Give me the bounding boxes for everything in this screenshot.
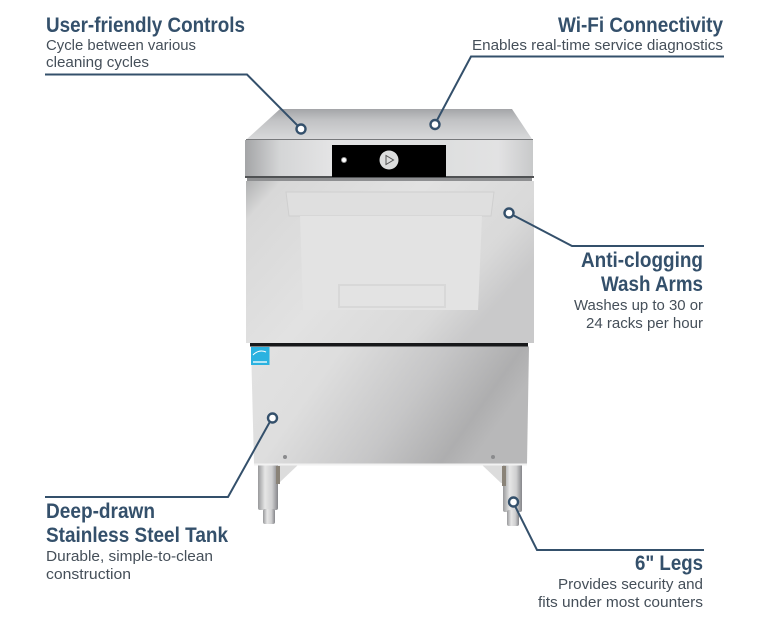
description <box>538 576 703 611</box>
left leg <box>258 463 299 524</box>
description: Cycle between various <box>46 37 196 54</box>
description: cleaning cycles <box>46 54 149 71</box>
description: fits under most counters <box>538 594 703 611</box>
right leg <box>481 463 522 526</box>
description: Enables real-time service diagnostics <box>472 37 723 54</box>
leader line <box>435 56 724 124</box>
marker <box>296 124 306 134</box>
indicator light <box>342 158 346 162</box>
door handle <box>286 192 494 216</box>
top panel <box>247 109 532 139</box>
description <box>46 37 196 71</box>
callout: wi-fi connectivity <box>430 14 724 129</box>
door <box>246 181 534 343</box>
heading <box>46 500 228 547</box>
heading: 6" Legs <box>635 552 703 575</box>
marker <box>430 120 440 129</box>
callout: user-friendly controls <box>45 14 306 134</box>
lower panel <box>251 346 529 466</box>
control band <box>245 140 533 176</box>
start button <box>380 150 398 170</box>
callout: anti-clogging wash arms <box>504 208 704 332</box>
heading: Stainless Steel Tank <box>46 524 228 547</box>
description <box>574 297 703 332</box>
callout: 6 inch legs <box>509 498 704 611</box>
description <box>46 548 213 583</box>
description: Washes up to 30 or <box>574 297 703 314</box>
description: construction <box>46 566 131 583</box>
heading <box>581 249 703 296</box>
leader line <box>513 502 704 550</box>
description: Durable, simple-to-clean <box>46 548 213 565</box>
heading: Wi-Fi Connectivity <box>558 14 723 37</box>
control panel <box>332 145 446 177</box>
marker <box>509 498 518 506</box>
dishwasher machine <box>245 109 534 526</box>
heading: Deep-drawn <box>46 500 155 523</box>
heading: User-friendly Controls <box>46 14 245 37</box>
energy star label <box>251 347 270 365</box>
marker <box>504 208 514 218</box>
leader line <box>509 213 704 246</box>
marker <box>268 414 277 422</box>
leader line <box>45 418 272 497</box>
heading: Anti-clogging <box>581 249 703 272</box>
leader line <box>45 74 301 129</box>
description: Provides security and <box>558 576 703 593</box>
description: 24 racks per hour <box>586 315 703 332</box>
heading: Wash Arms <box>601 273 703 296</box>
callout: deep-drawn stainless steel tank <box>45 414 277 583</box>
